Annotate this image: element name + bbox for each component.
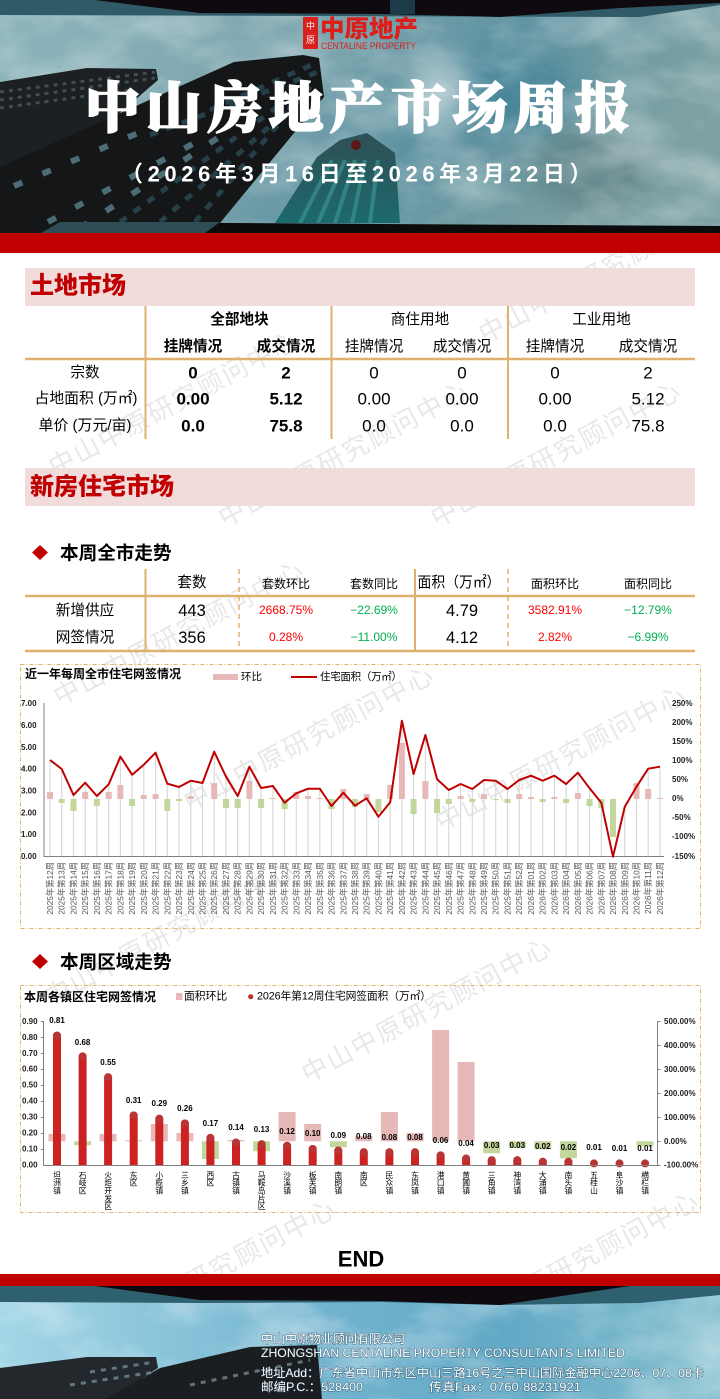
chart title: 本周各镇区住宅网签情况 — [24, 989, 156, 1004]
week category labels: 2025年第31周 — [268, 862, 278, 915]
week category labels: 2025年第50周 — [491, 862, 501, 915]
district category labels: 三角镇 — [487, 1171, 496, 1195]
table: city-wide trend: 0.28% — [269, 630, 303, 644]
left axis labels: 0.00 — [22, 1160, 38, 1170]
week category labels: 2026年第07周 — [596, 862, 606, 915]
week category labels: 2025年第23周 — [174, 862, 184, 915]
table: city-wide trend: 2668.75% — [259, 603, 313, 617]
week category labels: 2025年第42周 — [397, 862, 407, 915]
line: residential area — [50, 721, 660, 857]
date range: （2026年3月16日至2026年3月22日） — [121, 162, 596, 186]
week category labels: 2025年第26周 — [209, 862, 219, 915]
table: city-wide trend: 套数环比 — [262, 576, 310, 591]
right axis labels: 250% — [672, 699, 692, 708]
bars: area change negative — [74, 1141, 654, 1159]
data labels: 0.04 — [458, 1139, 474, 1148]
district category labels: 石岐区 — [78, 1171, 87, 1194]
right axis labels: -100% — [672, 832, 695, 841]
table: land market: 占地面积 (万㎡) — [34, 390, 138, 407]
data labels: 0.12 — [279, 1127, 295, 1136]
table: land market: 0 — [457, 364, 467, 382]
logo: CENTALINE PROPERTY — [321, 41, 417, 52]
right axis labels: 400.00% — [664, 1041, 696, 1050]
right axis labels: -100.00% — [664, 1160, 698, 1170]
data labels: 0.81 — [49, 1016, 65, 1025]
right axis labels: 300.00% — [664, 1065, 696, 1074]
table: city-wide trend: 面积环比 — [531, 577, 579, 591]
heading: 土地市场 — [25, 268, 695, 306]
right axis labels: 0% — [672, 794, 684, 803]
week category labels: 2026年第06周 — [585, 862, 595, 915]
left axis labels: 0.70 — [22, 1049, 38, 1058]
left axis labels: 2.00 — [21, 808, 37, 818]
left axis labels: 6.00 — [21, 721, 37, 730]
table: land market: 单价 (万元/亩) — [38, 416, 132, 434]
district category labels — [52, 1170, 650, 1210]
right axis labels: 200.00% — [664, 1089, 696, 1098]
week category labels: 2025年第47周 — [456, 862, 466, 915]
axes — [41, 1021, 660, 1166]
footer — [0, 1274, 720, 1399]
week category labels: 2025年第19周 — [127, 862, 137, 915]
week category labels: 2025年第25周 — [198, 862, 208, 915]
district category labels: 大涌镇 — [538, 1170, 547, 1195]
district category labels: 火炬开发区 — [103, 1171, 113, 1210]
week category labels: 2025年第33周 — [291, 862, 301, 915]
table: city-wide trend: 面积（万㎡） — [418, 574, 500, 591]
data labels: 0.08 — [382, 1133, 398, 1142]
district category labels: 古镇镇 — [231, 1170, 240, 1195]
table: land market: 工业用地 — [572, 311, 631, 328]
district category labels: 马鞍岛片区 — [257, 1171, 266, 1210]
district category labels: 港口镇 — [436, 1170, 445, 1195]
data labels: 0.01 — [612, 1144, 628, 1153]
data labels: 0.31 — [126, 1096, 142, 1105]
table: land market: 0 — [188, 364, 198, 382]
week category labels: 2026年第11周 — [643, 862, 653, 914]
week category labels: 2025年第39周 — [362, 862, 372, 915]
week category labels: 2025年第30周 — [256, 862, 266, 915]
panel: district chart — [20, 986, 700, 1212]
left axis labels — [22, 1017, 38, 1170]
footer city photo background — [0, 1286, 720, 1399]
week category labels: 2025年第48周 — [467, 862, 477, 915]
left axis labels: 0.90 — [22, 1017, 38, 1026]
week category labels: 2025年第15周 — [80, 862, 90, 915]
table: land market: 全部地块 — [210, 310, 269, 328]
main title: 中山房地产市场周报 — [85, 78, 636, 140]
week category labels: 2025年第13周 — [57, 862, 67, 915]
week category labels: 2025年第45周 — [432, 862, 442, 915]
left axis labels: 0.40 — [22, 1097, 38, 1106]
table: land market: 0.0 — [181, 416, 205, 436]
left axis labels: 0.80 — [22, 1033, 38, 1042]
district category labels: 南区 — [359, 1170, 368, 1187]
week category labels: 2025年第34周 — [303, 862, 313, 915]
data labels: 0.13 — [254, 1125, 270, 1134]
watermark layer: 中山中原研究顾问中心 — [425, 375, 687, 533]
company details — [261, 1331, 704, 1394]
table: city-wide trend: 新增供应 — [56, 601, 114, 619]
company details: 地址Add：广东省中山市东区中山三路16号之三中山国际金融中心2206、07、08卡 — [261, 1365, 704, 1380]
week category labels: 2026年第05周 — [573, 862, 583, 915]
table: land market: 挂牌情况 — [526, 338, 585, 355]
table: land market: 0.0 — [543, 416, 567, 436]
heading: 新房住宅市场: 新房住宅市场 — [30, 472, 174, 500]
logo — [303, 16, 418, 52]
lollipop dots — [53, 1032, 649, 1167]
header city photo background — [0, 0, 720, 233]
data labels: 0.02 — [561, 1143, 577, 1152]
left axis labels: 5.00 — [21, 743, 37, 752]
axes — [44, 703, 664, 856]
week category labels: 2026年第10周 — [632, 862, 642, 915]
week category labels: 2025年第28周 — [233, 862, 243, 915]
week category labels: 2025年第40周 — [373, 862, 383, 915]
table: land market: 2 — [643, 364, 653, 382]
district category labels: 东凤镇 — [410, 1170, 420, 1195]
table: city-wide trend: 356 — [178, 629, 206, 647]
left axis labels: 0.20 — [22, 1128, 38, 1138]
data labels: 0.01 — [637, 1144, 653, 1153]
left axis labels: 7.00 — [21, 699, 37, 708]
heading: 土地市场: 土地市场 — [30, 272, 126, 300]
company details: ZHONGSHAN CENTALINE PROPERTY CONSULTANTS LIMITED — [261, 1346, 625, 1360]
watermark layer: 中山中原研究顾问中心 — [43, 324, 305, 482]
table: land market — [25, 306, 695, 439]
table: city-wide trend: 网签情况 — [56, 629, 115, 646]
bars: negative change — [59, 799, 616, 837]
heading: 本周全市走势: 本周全市走势 — [60, 542, 172, 564]
heading: 本周区域走势: 本周区域走势 — [60, 952, 172, 972]
watermark layer: 中山中原研究顾问中心 — [430, 679, 692, 837]
week category labels: 2025年第51周 — [502, 862, 512, 915]
data labels: 0.17 — [203, 1119, 219, 1128]
district category labels: 横栏镇 — [640, 1170, 650, 1195]
left axis labels: 1.00 — [21, 830, 37, 839]
company details: 中山中原物业顾问有限公司 — [261, 1331, 405, 1346]
table: land market: 成交情况 — [619, 337, 678, 355]
data labels: 0.10 — [305, 1129, 321, 1138]
week category labels — [45, 862, 665, 915]
table: land market: 0 — [550, 364, 560, 382]
data labels: 0.03 — [484, 1141, 500, 1150]
week category labels: 2025年第46周 — [444, 862, 454, 915]
right axis labels: 200% — [672, 718, 692, 727]
week category labels: 2025年第36周 — [326, 862, 336, 915]
district category labels: 东区 — [129, 1170, 138, 1187]
legend: 2026年第12周住宅网签面积（万㎡） — [257, 988, 431, 1002]
table: city-wide trend: 4.12 — [446, 629, 478, 647]
table: land market: 75.8 — [631, 416, 665, 436]
district category labels: 西区 — [206, 1171, 215, 1187]
table: city-wide trend: 4.79 — [446, 602, 478, 620]
table: land market: 5.12 — [269, 390, 303, 408]
watermark layer: 中山中原研究顾问中心 — [39, 854, 301, 1012]
panel: weekly city-wide chart — [20, 664, 700, 928]
table: land market: 挂牌情况 — [345, 338, 404, 355]
right axis labels — [664, 1017, 698, 1170]
table: land market: 0.0 — [362, 416, 386, 436]
left axis labels: 0.00 — [21, 852, 37, 861]
legend: 环比 — [241, 670, 262, 683]
district category labels: 小榄镇 — [155, 1171, 164, 1195]
table: land market: 5.12 — [631, 390, 665, 408]
week category labels: 2025年第41周 — [385, 862, 395, 915]
week category labels: 2025年第32周 — [280, 862, 290, 915]
data labels: 0.06 — [433, 1136, 449, 1145]
right axis labels: 150% — [672, 737, 692, 746]
week category labels: 2026年第01周 — [526, 862, 536, 915]
table: land market: 0.00 — [176, 390, 210, 408]
watermark layer: 中山中原研究顾问中心 — [213, 375, 475, 533]
right axis labels — [672, 699, 695, 861]
right axis labels: 50% — [672, 775, 688, 784]
logo: 中 — [306, 20, 315, 31]
district category labels: 民众镇 — [385, 1171, 394, 1195]
table: land market: 商住用地 — [391, 311, 450, 328]
week category labels: 2025年第14周 — [68, 862, 78, 915]
week category labels: 2025年第35周 — [315, 862, 325, 915]
bars: area change positive — [48, 1030, 475, 1141]
table: city-wide trend: 443 — [178, 602, 206, 620]
data labels: 0.09 — [331, 1131, 347, 1140]
left axis labels: 0.30 — [22, 1113, 38, 1122]
table: land market: 0.0 — [450, 416, 474, 436]
left axis labels: 0.10 — [22, 1144, 38, 1154]
table: city-wide trend: 面积同比 — [624, 577, 672, 591]
company details: 邮编P.C.：528400 — [261, 1379, 363, 1394]
district category labels: 坦洲镇 — [52, 1171, 62, 1195]
week category labels: 2025年第49周 — [479, 862, 489, 915]
right axis labels: 0.00% — [664, 1137, 687, 1146]
week category labels: 2025年第20周 — [139, 862, 149, 915]
table: city-wide trend: −6.99% — [627, 630, 669, 644]
week category labels: 2026年第08周 — [608, 862, 618, 915]
week category labels: 2026年第02周 — [538, 862, 548, 915]
table: city-wide trend: 2.82% — [538, 630, 572, 644]
table: land market: 0 — [369, 364, 379, 382]
left axis labels: 0.50 — [22, 1081, 38, 1090]
table: land market: 0.00 — [538, 390, 572, 408]
table: land market: 0.00 — [357, 390, 391, 408]
right axis labels: -150% — [672, 852, 695, 861]
data labels: 0.26 — [177, 1104, 193, 1113]
table: land market: 75.8 — [269, 416, 303, 436]
week category labels: 2025年第27周 — [221, 862, 231, 915]
data labels: 0.03 — [510, 1141, 526, 1150]
table: land market: 0.00 — [445, 390, 479, 408]
district category labels: 三乡镇 — [180, 1171, 189, 1195]
table: land market: 宗数 — [70, 364, 100, 381]
week category labels: 2025年第38周 — [350, 862, 360, 915]
lollipop columns — [53, 1032, 572, 1165]
week category labels: 2025年第18周 — [115, 862, 125, 915]
footer red bar — [0, 1274, 720, 1286]
data labels: 0.14 — [228, 1123, 244, 1132]
legend: 住宅面积（万㎡） — [320, 670, 402, 683]
left axis labels — [21, 699, 37, 861]
chart title: 近一年每周全市住宅网签情况 — [25, 666, 181, 681]
right axis labels: -50% — [672, 813, 691, 822]
left axis labels: 3.00 — [21, 786, 37, 796]
week category labels: 2025年第22周 — [162, 862, 172, 915]
data labels: 0.08 — [407, 1133, 423, 1142]
week category labels: 2025年第17周 — [104, 862, 114, 915]
data labels: 0.01 — [586, 1143, 602, 1152]
district category labels: 黄圃镇 — [462, 1170, 471, 1195]
table: city-wide trend: 套数同比 — [350, 576, 398, 591]
week category labels: 2025年第44周 — [420, 862, 430, 915]
data labels: 0.02 — [535, 1142, 551, 1151]
legend — [213, 670, 402, 683]
watermark layer: 中山中原研究顾问中心 — [48, 554, 310, 712]
bars: positive change — [47, 743, 663, 799]
watermark layer: 中山中原研究顾问中心 — [178, 659, 440, 817]
district category labels: 板芙镇 — [308, 1170, 317, 1195]
company details: 传真Fax：0760-88231921 — [429, 1379, 581, 1394]
district category labels: 南头镇 — [564, 1170, 573, 1195]
district category labels: 五桂山 — [589, 1171, 598, 1195]
table: land market: 成交情况 — [257, 337, 316, 355]
week category labels: 2025年第16周 — [92, 862, 102, 915]
left axis labels: 4.00 — [21, 764, 37, 774]
week category labels: 2025年第43周 — [409, 862, 419, 915]
heading: 新房住宅市场 — [25, 468, 695, 506]
watermark layer: 中山中原研究顾问中心 — [296, 931, 558, 1089]
watermark layer: 中山中原研究顾问中心 — [443, 1185, 705, 1343]
watermark layer: 中山中原研究顾问中心 — [80, 1193, 342, 1351]
week category labels: 2026年第04周 — [561, 862, 571, 915]
end mark: END — [338, 1246, 384, 1272]
logo: 中原地产 — [320, 16, 418, 43]
table: city-wide trend: 3582.91% — [528, 603, 582, 617]
table: city-wide trend: −11.00% — [351, 630, 398, 644]
week category labels: 2026年第03周 — [549, 862, 559, 915]
data labels: 0.55 — [100, 1058, 116, 1067]
table: land market: 挂牌情况 — [164, 337, 223, 355]
data labels: 0.29 — [152, 1099, 168, 1108]
drop lines — [50, 721, 660, 856]
table: city-wide trend: 套数 — [177, 574, 207, 591]
week category labels: 2025年第24周 — [186, 862, 196, 915]
legend — [176, 988, 431, 1002]
header banner — [0, 0, 720, 253]
right axis labels: 500.00% — [664, 1017, 696, 1026]
week category labels: 2025年第37周 — [338, 862, 348, 915]
logo: 原 — [306, 35, 315, 45]
table: land market: 2 — [281, 364, 291, 382]
left axis labels: 0.60 — [22, 1065, 38, 1074]
right axis labels: 100.00% — [664, 1113, 696, 1122]
table: city-wide trend: −22.69% — [350, 603, 398, 617]
data labels: 0.08 — [356, 1132, 372, 1141]
week category labels: 2026年第09周 — [620, 862, 630, 915]
table: city-wide trend — [25, 569, 695, 651]
right axis labels: 100% — [672, 756, 692, 765]
legend: 面积环比 — [184, 990, 227, 1002]
watermark layer — [39, 191, 720, 1351]
table: city-wide trend: −12.79% — [624, 603, 672, 617]
district category labels: 南朗镇 — [334, 1170, 343, 1195]
week category labels: 2025年第52周 — [514, 862, 524, 915]
data labels: 0.68 — [75, 1038, 91, 1047]
week category labels: 2025年第21周 — [151, 862, 161, 915]
district category labels: 阜沙镇 — [615, 1170, 624, 1195]
district category labels: 沙溪镇 — [282, 1171, 292, 1195]
week category labels: 2025年第29周 — [244, 862, 254, 915]
week category labels: 2025年第12周 — [45, 862, 55, 915]
table: land market: 成交情况 — [433, 337, 492, 355]
data labels — [49, 1016, 653, 1153]
red bar — [0, 233, 720, 253]
week category labels: 2026年第12周 — [655, 862, 665, 915]
district category labels: 神湾镇 — [513, 1170, 522, 1195]
